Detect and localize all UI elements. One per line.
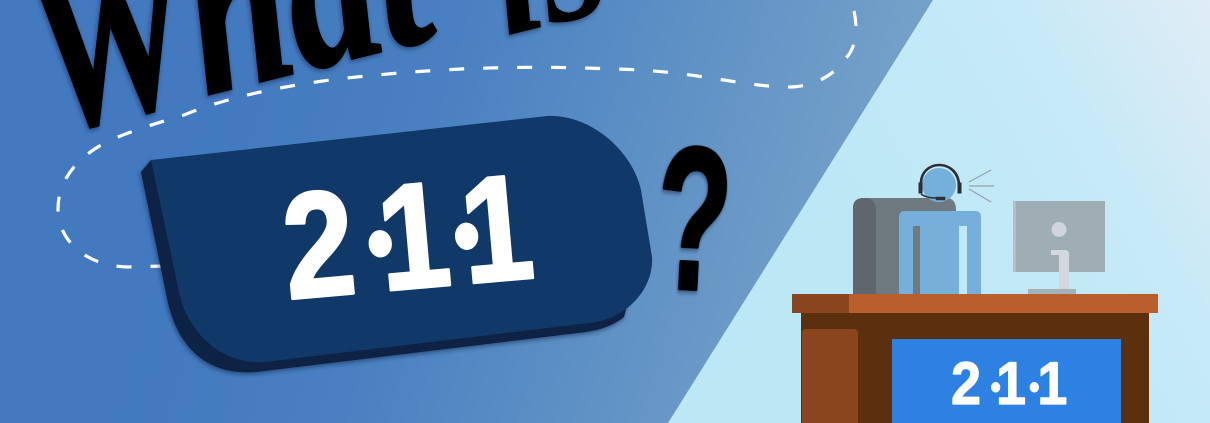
badge: 2-1-1 (141, 116, 652, 372)
headset (919, 165, 961, 200)
desk sign: 2-1-1: 2 (951, 350, 981, 418)
question mark: ? (651, 103, 737, 334)
monitor (1013, 201, 1105, 294)
desk sign: 2-1-1: 1 (996, 350, 1026, 418)
sound lines (969, 170, 994, 202)
chair (853, 198, 956, 294)
desk sign: 2-1-1 (892, 339, 1121, 423)
badge depth (141, 160, 640, 372)
badge number: 1 (371, 150, 456, 323)
background: blue diagonal panel (0, 0, 933, 423)
desk sign: 2-1-1: 1 (1037, 350, 1067, 418)
badge number: • (364, 194, 397, 291)
illustration: operator at desk (792, 165, 1158, 423)
badge number: 1 (454, 143, 539, 316)
desk sign: 2-1-1: • (991, 370, 1001, 405)
operator (899, 165, 981, 294)
desk (792, 294, 1158, 423)
badge face (151, 116, 652, 362)
dashed route line (58, 11, 856, 267)
desk sign: 2-1-1: • (1029, 370, 1039, 405)
badge number: • (450, 187, 483, 283)
badge number: 2 (276, 159, 361, 331)
